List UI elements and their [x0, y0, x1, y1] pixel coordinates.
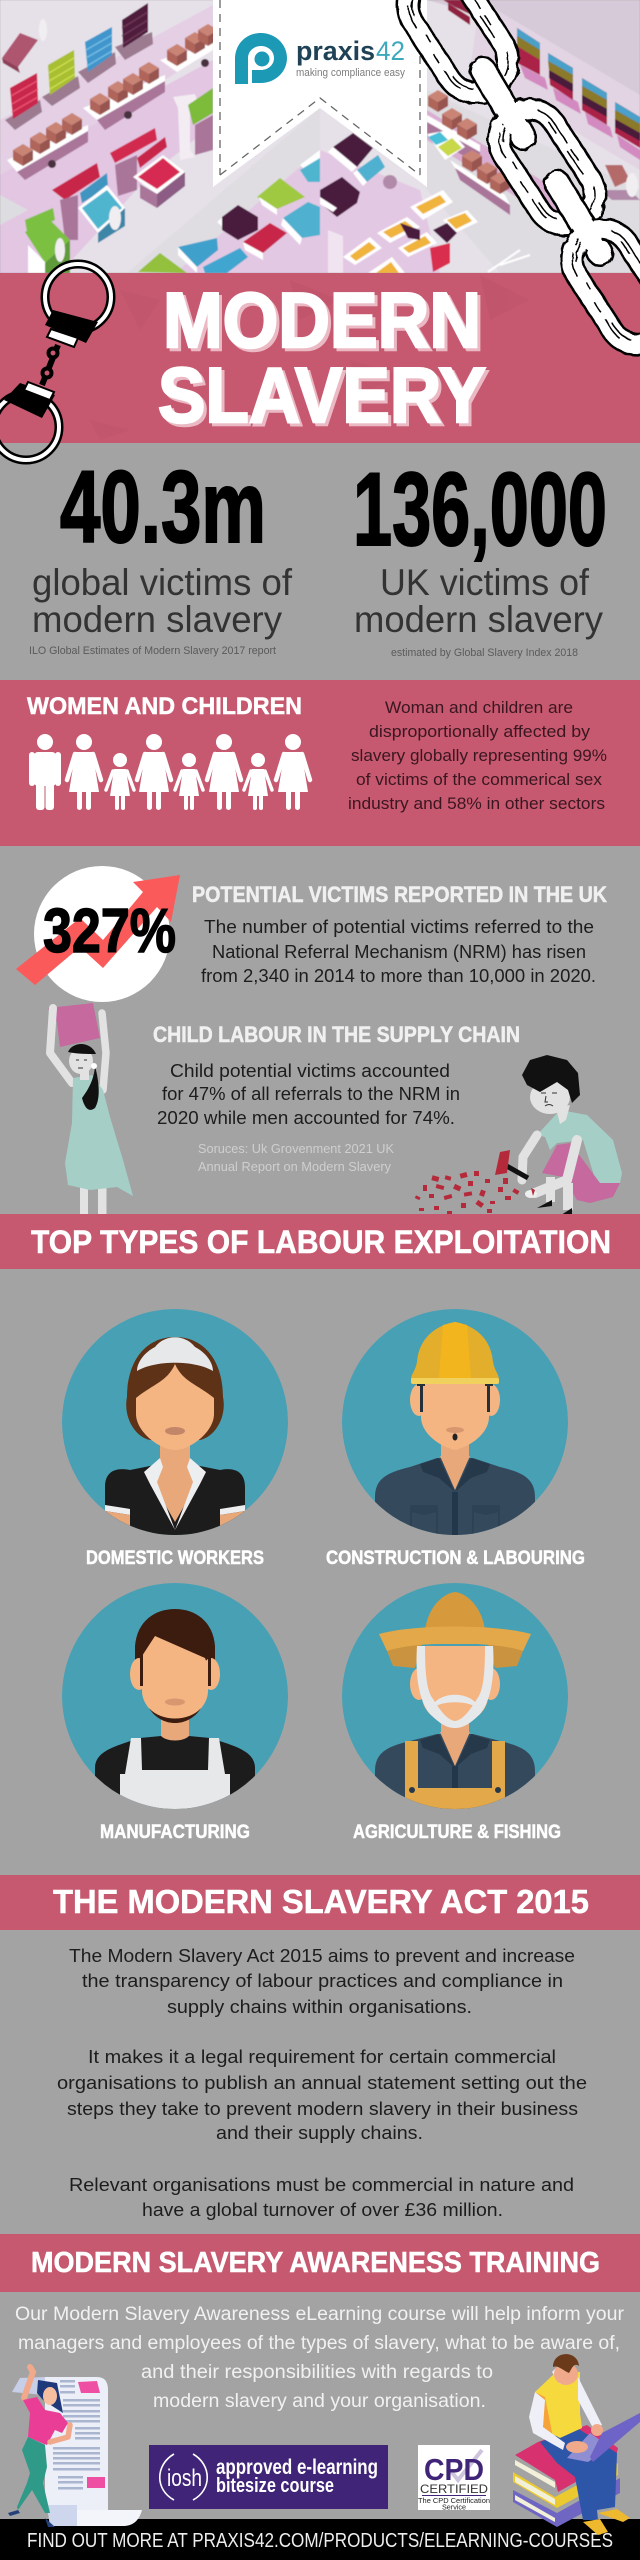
text: child labour in the supply chain: for 47% of all referrals to the NRM in [162, 1084, 460, 1104]
banner: top types of labour exploitation: TOP TYPES OF LABOUR EXPLOITATION [31, 1224, 611, 1260]
text: training description: modern slavery and your organisation. [153, 2391, 486, 2412]
text: modern slavery act explanation: and their supply chains. [216, 2123, 423, 2143]
title: modern slavery: MODERN [163, 276, 481, 364]
persona: agriculture and fishing [342, 1583, 568, 1843]
icon: maid [62, 1309, 288, 1542]
text: modern slavery act explanation: It makes it a legal requirement for certain commercial [88, 2047, 556, 2067]
title: modern slavery: SLAVERY [161, 354, 489, 442]
banner: top types of labour exploitation [0, 1214, 640, 1269]
illustration: woman carrying load [48, 1003, 133, 1218]
logo: CPD certified: CPD [424, 2452, 484, 2487]
text: child labour in the supply chain: CHILD LABOUR IN THE SUPPLY CHAIN [153, 1022, 520, 1047]
hero: factory floor illustration [0, 0, 640, 273]
stat: UK victims: estimated by Global Slavery Index 2018 [391, 647, 578, 659]
stat: UK victims: modern slavery [354, 599, 603, 640]
title: modern slavery: MODERN [166, 279, 484, 367]
logo: praxis42: praxis [296, 36, 375, 66]
logo: praxis42 [235, 33, 405, 84]
stat: global victims: 40.3m [60, 450, 266, 564]
banner: the modern slavery act 2015: THE MODERN SLAVERY ACT 2015 [53, 1883, 589, 1920]
title: modern slavery [158, 276, 489, 442]
yellow tables [328, 190, 530, 273]
icon: handcuffs [0, 264, 111, 460]
panel: women and children [0, 680, 640, 846]
logo: praxis42: 42 [376, 36, 405, 66]
text: training description [15, 2304, 625, 2412]
persona: manufacturing [62, 1583, 288, 1843]
banner: modern slavery awareness training [0, 2234, 640, 2292]
stat: UK victims [353, 452, 607, 659]
label: MANUFACTURING [100, 1822, 250, 1843]
label: AGRICULTURE & FISHING [353, 1822, 561, 1843]
broken red bricks [415, 1171, 519, 1218]
logo: praxis42: making compliance easy [296, 67, 405, 79]
text: potential victims reported [192, 882, 607, 986]
heading: women and children: WOMEN AND CHILDREN [27, 693, 302, 720]
logo: iosh approved e-learning: approved e-learning [216, 2456, 378, 2479]
stat: global victims: ILO Global Estimates of Modern Slavery 2017 report [29, 645, 276, 657]
logo: iosh approved e-learning: bitesize course [216, 2475, 334, 2497]
logo: iosh approved e-learning [149, 2445, 388, 2509]
icon: row of people [29, 734, 310, 810]
text: child labour in the supply chain [153, 1022, 520, 1174]
text: potential victims reported: The number of potential victims referred to the [204, 917, 594, 937]
text: women and children statistic: disproportionally affected by [369, 722, 591, 741]
text: women and children statistic: slavery globally representing 99% [351, 746, 607, 765]
shelves and boxes right [427, 0, 640, 215]
logo: CPD certified: CERTIFIED [420, 2482, 488, 2496]
logo: iosh approved e-learning: iosh [167, 2465, 202, 2492]
logo: CPD certified: The CPD Certification [418, 2496, 490, 2505]
persona: construction and labouring [326, 1309, 585, 1569]
stat: global victims: modern slavery [32, 599, 282, 640]
text: training description: Our Modern Slavery Awareness eLearning course will help inform your [15, 2304, 625, 2325]
ribbon with logo [213, 0, 427, 187]
text: women and children statistic: Woman and children are [385, 698, 573, 717]
text: modern slavery act explanation: have a global turnover of over £36 million. [142, 2200, 503, 2220]
text: modern slavery act explanation: organisations to publish an annual statement setting out the [57, 2073, 587, 2093]
stat: UK victims: UK victims of [380, 562, 590, 603]
logo: CPD certified [418, 2445, 490, 2512]
banner: the modern slavery act 2015 [0, 1875, 640, 1930]
icon: hammer [495, 1150, 528, 1178]
illustration: man on books with laptop [513, 2354, 640, 2535]
text: modern slavery act explanation [57, 1946, 587, 2220]
label: CONSTRUCTION & LABOURING [326, 1548, 585, 1569]
logo: CPD certified: Service [442, 2504, 466, 2512]
icon: builder [342, 1309, 568, 1542]
text: child labour in the supply chain: Soruces: Uk Grovenment 2021 UK [198, 1142, 395, 1156]
illustration: woman with document [8, 2367, 142, 2527]
text: training description: managers and employees of the types of slavery, what to be aware of, [18, 2333, 620, 2354]
icon: 327% growth arrow [16, 866, 180, 1002]
text: modern slavery act explanation: The Modern Slavery Act 2015 aims to prevent and increase [69, 1946, 575, 1966]
box benches [7, 24, 218, 180]
illustration: child breaking bricks [415, 1055, 622, 1218]
text: modern slavery act explanation: supply chains within organisations. [167, 1997, 472, 2017]
shelves left [2, 3, 153, 130]
text: child labour in the supply chain: Annual Report on Modern Slavery [198, 1160, 392, 1174]
icon: factory worker [62, 1583, 288, 1816]
stat: global victims: global victims of [32, 562, 293, 603]
title: modern slavery: SLAVERY [158, 351, 486, 439]
text: training description: and their responsibilities with regards to [141, 2362, 493, 2383]
text: women and children statistic: industry and 58% in other sectors [348, 794, 605, 813]
label: DOMESTIC WORKERS [86, 1548, 264, 1569]
text: child labour in the supply chain: 2020 while men accounted for 74%. [157, 1108, 455, 1128]
stat: global victims [29, 450, 293, 657]
text: modern slavery act explanation: Relevant organisations must be commercial in nature and [69, 2175, 574, 2195]
banner: modern slavery awareness training: MODERN SLAVERY AWARENESS TRAINING [31, 2247, 600, 2279]
title band [0, 273, 640, 443]
text: women and children statistic [348, 698, 607, 813]
text: child labour in the supply chain: Child potential victims accounted [170, 1061, 450, 1081]
sewing tables [25, 88, 397, 273]
text: women and children statistic: of victims of the commerical sex [356, 770, 603, 789]
icon: farmer [342, 1583, 568, 1816]
text: modern slavery act explanation: steps they take to prevent modern slavery in their business [67, 2099, 578, 2119]
hand with brick [525, 1188, 537, 1198]
icon: 327% growth arrow: 327% [43, 897, 176, 966]
text: potential victims reported: from 2,340 in 2014 to more than 10,000 in 2020. [201, 966, 596, 986]
text: potential victims reported: National Referral Mechanism (NRM) has risen [212, 942, 586, 962]
text: modern slavery act explanation: the transparency of labour practices and compliance in [82, 1971, 563, 1991]
persona: domestic workers [62, 1309, 288, 1569]
footer bar [0, 2519, 640, 2560]
icon: chain [396, 0, 640, 356]
